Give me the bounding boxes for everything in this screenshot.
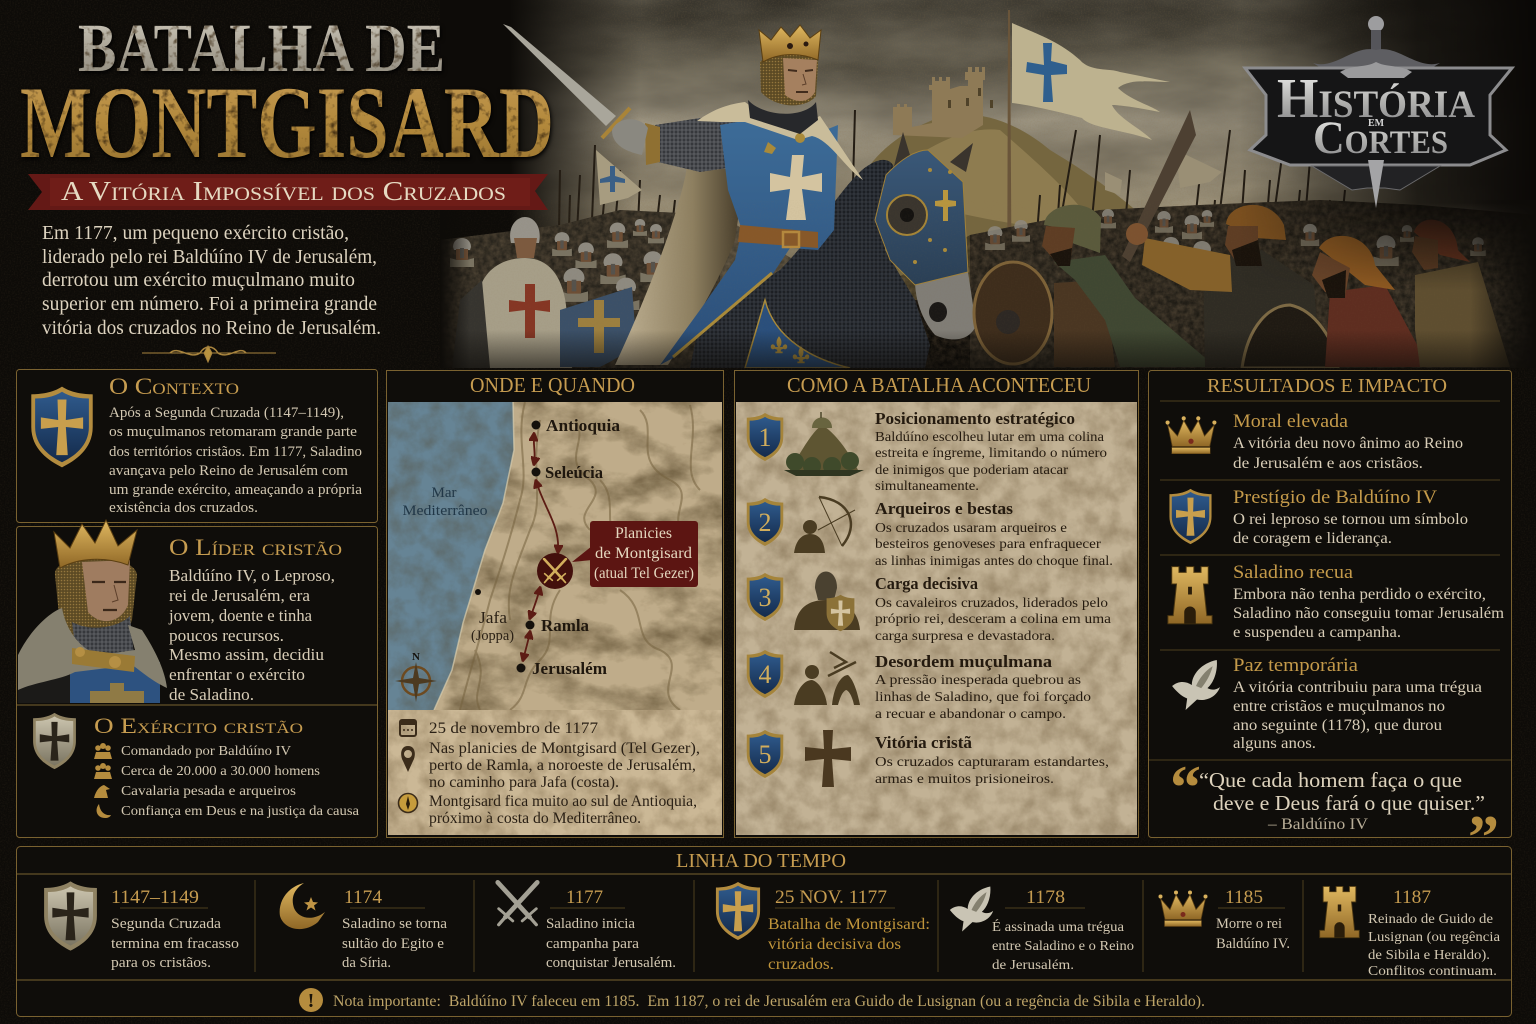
crown [759,25,821,62]
text [875,733,1109,787]
event 1147–1149: para os cristãos. [111,955,211,971]
info text: no caminho para Jafa (costa). [429,774,619,791]
info text [429,720,700,827]
warrior ochre [1126,205,1320,367]
icon: knight [794,572,860,631]
text: entre cristãos e muçulmanos no [1233,698,1445,715]
event 1147–1149: termina em fracasso [111,936,239,952]
muslim warriors [974,110,1510,368]
icon: cross [805,730,851,787]
icon: fleeing soldiers [794,652,860,705]
event 1177: campanha para [546,936,639,952]
step 5 [747,730,1109,787]
text: as linhas inimigas antes do choque final. [875,554,1113,569]
text: Paz temporária [1233,656,1358,676]
title line: Batalha de: BATALHA DE [78,10,445,86]
heading: ONDE E QUANDO [470,373,635,397]
event 25 Nov 1177 [716,882,930,973]
logo guard and blade [1312,62,1440,208]
sea label: Mar [432,485,456,501]
intro paragraph: Em 1177, um pequeno exército cristão, [42,223,349,244]
icon: dove [1172,660,1220,710]
text [875,499,1113,569]
text: próprio rei, desceram a colina em uma [875,612,1112,627]
panel: christian leader and army [16,520,378,838]
body text: um grande exército, ameaçando a própria [109,482,363,498]
text: alguns anos. [1233,735,1316,752]
mail arm and hand [612,118,736,172]
sea label [402,485,488,519]
note text: Nota importante: Baldúíno IV faleceu em 1185. Em 1187, o rei de Jerusalém era Guido de Lusignan (ou a regência de Sibila e Heraldo). [333,993,1205,1010]
icon: tower [1168,567,1212,624]
body text: dos territórios cristãos. Em 1177, Saladino [109,444,362,460]
heading: LINHA DO TEMPO [676,851,846,872]
text: estreita e íngreme, limitando o número [875,446,1107,461]
ornament [142,346,276,362]
city markers [475,420,540,672]
intro paragraph: liderado pelo rei Baldúíno IV de Jerusalém, [42,247,377,268]
text: carga surpresa e devastadora. [875,629,1055,644]
body text: Baldúíno IV, o Leproso, [169,566,335,585]
intro paragraph: vitória dos cruzados no Reino de Jerusalém. [42,318,381,339]
event 1178: 1178 [1026,887,1065,908]
panel: how the battle happened [734,370,1138,838]
number shield [747,413,783,461]
event 1187: Reinado de Guido de [1368,911,1493,926]
text: Os cruzados capturaram estandartes, [875,755,1109,770]
text: Saladino recua [1233,563,1353,583]
warrior green [1042,205,1216,367]
text: de inimigos que poderiam atacar [875,463,1068,478]
sky [440,0,1536,300]
step 4 [747,650,1091,722]
icon: hill [784,412,864,476]
list text [121,744,360,819]
list text: Confiança em Deus e na justiça da causa [121,804,360,819]
city names: Jerusalém [532,659,607,678]
event 1174 [280,883,447,971]
text: A pressão inesperada quebrou as [875,673,1081,688]
event 1174: sultão do Egito e [342,936,444,952]
number shield: 2 [758,508,772,537]
body text: os muçulmanos retomaram grande parte [109,424,357,440]
text: linhas de Saladino, que foi forçado [875,690,1091,705]
text [1233,488,1468,547]
icon: crown [1166,416,1216,454]
text: a recuar e abandonar o campo. [875,707,1066,722]
event 1177 [498,882,676,971]
step 1 [747,409,1107,494]
icon: blue shield [1169,489,1212,544]
event 1174: da Síria. [342,955,391,971]
icon: tower [1320,886,1359,938]
belt [738,225,818,248]
text: Posicionamento estratégico [875,409,1075,428]
body text: avançava pelo Reino de Jerusalém com [109,463,349,479]
event 1178 [950,886,1134,973]
text: Os cruzados usaram arqueiros e [875,521,1067,536]
panel: where and when [386,370,724,838]
event 1177: conquistar Jerusalém. [546,955,676,971]
banner with blue cross [1007,10,1170,228]
battle marker [537,553,573,589]
logo text em: EM [1368,118,1385,129]
event 1147–1149 [44,881,239,971]
city names [532,416,621,678]
info text: Montgisard fica muito ao sul de Antioquia, [429,793,697,810]
text: besteiros genoveses para enfraquecer [875,537,1101,552]
text: A vitória contribuiu para uma trégua [1233,679,1482,696]
icon: compass badge [398,794,418,812]
text [1233,412,1463,472]
sword [503,24,630,138]
small banners [596,150,1222,205]
heading: O Exército cristão [94,713,303,738]
warrior maroon [1312,236,1429,367]
logo: História em Cortes [1245,16,1512,208]
number shield [747,498,783,546]
event 1174: 1174 [344,887,383,908]
result: temporary peace [1172,656,1482,752]
map [388,402,722,710]
info text: perto de Ramla, a noroeste de Jerusalém, [429,757,696,774]
king cloak [615,167,745,365]
event 1187: de Sibila e Heraldo). [1368,947,1490,962]
intro paragraph: derrotou um exército muçulmano muito [42,270,355,291]
city names: Antioquia [546,416,621,435]
body text: Mesmo assim, decidiu [169,645,324,664]
warrior right [1412,220,1510,367]
body text [109,405,363,516]
raised spear [1122,110,1196,262]
scene grain and vignettes [440,0,1536,368]
number shield [747,650,783,698]
number shield: 4 [758,660,772,689]
number shield [747,730,783,778]
result: morale [1166,412,1463,472]
result: prestige [1169,488,1468,547]
text: A vitória deu novo ânimo ao Reino [1233,435,1463,452]
text: Carga decisiva [875,574,978,593]
event 1185 [1158,887,1290,952]
event 1147–1149: Segunda Cruzada [111,916,221,932]
text: simultaneamente. [875,479,979,494]
icon: archer and bow [794,497,855,553]
icon: crescent [280,883,325,929]
info block [388,710,722,835]
event 1187: Lusignan (ou regência [1368,929,1500,944]
compass rose [395,651,437,702]
icon: crossed swords [498,882,537,925]
body text [168,566,335,704]
text: e suspendeu a campanha. [1233,624,1401,641]
title line: Montgisard: MONTGISARD [20,66,554,180]
result: Saladin retreats [1168,563,1504,641]
text [1233,563,1504,641]
icon: crown [1158,890,1208,926]
number shield: 5 [758,740,772,769]
body text: jovem, doente e tinha [168,606,313,625]
crowd helmets right [985,209,1486,270]
step 2 [747,497,1113,569]
info text: próximo à costa do Mediterrâneo. [429,810,641,827]
crowd helmets left [552,219,664,310]
text: de Jerusalém e aos cristãos. [1233,455,1423,472]
compass rose: N [412,651,420,663]
templar knights [450,217,636,368]
king [503,24,863,365]
mail collar [748,100,818,134]
body text: enfrentar o exército [169,665,305,684]
icon: exclamation [299,988,323,1012]
event 1177: 1177 [566,887,603,908]
parchment [736,402,1137,835]
logo text Cortes: Cortes [1313,112,1448,164]
event 1174: Saladino se torna [342,916,447,932]
icon: blue shield [31,387,93,467]
info text: Nas planicies de Montgisard (Tel Gezer), [429,740,700,757]
text: ano seguinte (1178), que durou [1233,717,1442,734]
event 1185: Morre o rei [1216,916,1282,932]
heading: COMO A BATALHA ACONTECEU [787,373,1091,397]
number shield [747,573,783,621]
crowd mass [440,200,1536,368]
callout: battle plains [572,521,698,587]
event 1178: entre Saladino e o Reino [992,939,1134,954]
list text: Comandado por Baldúíno IV [121,744,291,759]
step 3 [747,572,1112,644]
Jaffa label [471,608,514,644]
second round shield [1242,305,1338,368]
heading: O Líder cristão [169,535,342,560]
event 1185: 1185 [1225,887,1263,908]
icon: pin [401,746,415,772]
closing quote mark: ” [1468,804,1499,872]
body text: de Saladino. [169,685,254,704]
text: Os cavaleiros cruzados, liderados pelo [875,596,1108,611]
callout: battle plains: (atual Tel Gezer) [594,565,694,582]
event 1178: É assinada uma trégua [992,918,1125,935]
text: Baldúíno escolheu lutar em uma colina [875,430,1105,445]
text: Vitória cristã [875,733,972,752]
text: de coragem e liderança. [1233,530,1392,547]
round shield [974,262,1052,364]
subtitle text: A Vitória Impossível dos Cruzados [61,176,506,206]
event 25 Nov 1177: Batalha de Montgisard: [768,916,930,933]
callout: battle plains: de Montgisard [595,545,692,562]
title [20,10,554,180]
event 25 Nov 1177: cruzados. [768,956,834,973]
list text: Cerca de 20.000 a 30.000 homens [121,764,320,779]
text: Desordem muçulmana [875,652,1052,671]
heading: RESULTADOS E IMPACTO [1207,376,1447,397]
text [1233,656,1482,752]
quote text: deve e Deus fará o que quiser.” [1213,791,1485,815]
icon: blue shield [716,882,760,940]
info text: 25 de novembro de 1177 [429,720,598,737]
body text: existência dos cruzados. [109,500,258,516]
event 1187 [1320,886,1500,978]
number shield: 1 [758,423,772,452]
quote [1170,754,1499,872]
distant spears [558,110,1346,225]
text [875,574,1112,644]
event 1177: Saladino inicia [546,916,635,932]
text: Arqueiros e bestas [875,499,1014,518]
coif and face [760,54,818,105]
event 1147–1149: 1147–1149 [111,887,199,908]
text: Saladino não conseguiu tomar Jerusalém [1233,605,1504,622]
callout: battle plains: Planicies [615,525,672,542]
logo sword hilt [1313,16,1440,78]
panel: context [16,370,378,522]
sea label: Mediterrâneo [402,503,488,519]
text: Prestígio de Baldúíno IV [1233,488,1438,508]
event 1178: de Jerusalém. [992,958,1074,973]
panel: results and impact [1148,370,1512,872]
logo plate [1245,68,1512,165]
icon: silver shield [33,713,76,769]
quote text [1199,768,1485,833]
logo text História: História [1277,68,1475,130]
icon: shield [44,881,97,951]
text: Embora não tenha perdido o exército, [1233,586,1486,603]
hill and castle [871,67,1134,300]
city names: Seleúcia [545,463,603,482]
event 25 Nov 1177: 25 NOV. 1177 [775,887,887,908]
hero illustration: battle scene [440,0,1536,368]
body text: rei de Jerusalém, era [169,586,311,605]
text: O rei leproso se tornou um símbolo [1233,511,1468,528]
text [875,409,1107,494]
horse head with blue chanfron [875,132,976,339]
panel: timeline [16,846,1512,1016]
quote text: – Baldúíno IV [1267,816,1368,833]
event 1187: 1187 [1393,887,1431,908]
text [875,652,1091,722]
Jaffa label: (Joppa) [471,628,514,644]
number shield: 3 [758,583,772,612]
Jaffa label: Jafa [479,608,507,627]
quote text: “Que cada homem faça o que [1199,768,1462,792]
text: Moral elevada [1233,412,1348,432]
city names: Ramla [541,616,589,635]
intro paragraph [42,223,381,339]
text: armas e muitos prisioneiros. [875,772,1054,787]
icon: exclamation: ! [308,990,314,1012]
portrait: Baldwin IV [18,520,167,703]
event 25 Nov 1177: vitória decisiva dos [768,936,901,953]
opening quote mark: “ [1170,754,1201,822]
icon: calendar [400,720,416,736]
event 1187: Conflitos continuam. [1368,963,1497,978]
route arrows [523,434,558,660]
heading: O Contexto [109,374,239,399]
event 1185: Baldúíno IV. [1216,936,1290,952]
list icons [94,743,112,818]
body text: poucos recursos. [169,626,284,645]
intro paragraph: superior em número. Foi a primeira grande [42,294,377,315]
list text: Cavalaria pesada e arqueiros [121,784,296,799]
shoulder cape [697,102,863,180]
body text: Após a Segunda Cruzada (1147–1149), [109,405,344,421]
subtitle ribbon [28,174,548,210]
horse body [690,160,930,368]
tabard [660,118,838,365]
note [299,988,1205,1012]
icon: dove [950,886,993,932]
